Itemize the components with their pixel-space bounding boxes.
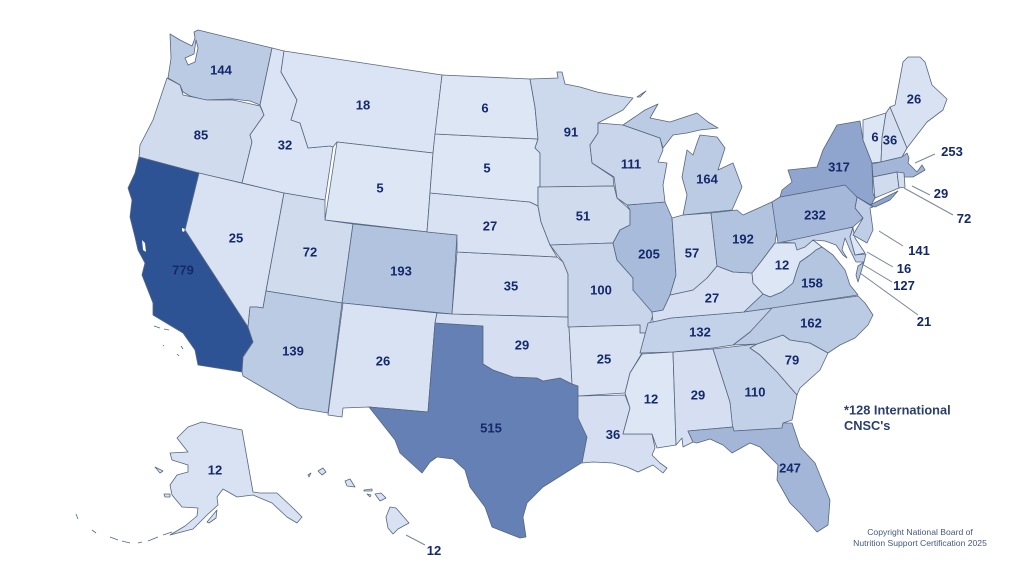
state: Texas	[369, 323, 587, 538]
state: Indiana	[670, 213, 717, 295]
state: Oregon: 85	[194, 128, 208, 142]
state: Nevada	[185, 173, 284, 327]
state: Florida	[688, 423, 830, 532]
leader label: New Jersey 141	[879, 231, 930, 258]
copyright	[853, 527, 987, 548]
state: Massachusetts	[872, 153, 925, 177]
label 12 for Hawaii with leader: 12	[427, 543, 441, 558]
state: Iowa	[538, 186, 630, 245]
state: Louisiana: 36	[606, 427, 620, 442]
state: Kansas	[452, 252, 568, 317]
state: Iowa: 51	[576, 208, 590, 224]
state: Wyoming	[325, 142, 433, 232]
state: Arizona: 139	[282, 344, 304, 358]
state: South Dakota: 5	[483, 160, 491, 176]
state: New Mexico	[328, 303, 437, 417]
state: Alabama: 29	[691, 388, 705, 402]
state: Idaho: 32	[278, 138, 292, 152]
note: international CNSCs: CNSC's	[844, 418, 890, 433]
state: Wisconsin	[590, 123, 667, 205]
leader label: Massachusetts 253	[915, 144, 963, 163]
state: Alabama	[673, 349, 733, 447]
state: California	[128, 157, 253, 372]
state: Illinois: 205	[638, 246, 660, 262]
state: Illinois	[613, 202, 676, 312]
state: Arizona	[242, 291, 342, 413]
leader label: DC 21: 21	[917, 314, 931, 329]
leader label: Rhode Island 29: 29	[934, 186, 948, 201]
state: Indiana: 57	[685, 246, 699, 260]
state: Arkansas: 25	[597, 352, 611, 366]
state: Vermont: 6	[871, 130, 879, 144]
state: Wyoming: 5	[376, 180, 384, 196]
state: Ohio	[711, 202, 777, 273]
state: Georgia: 110	[745, 384, 765, 400]
state: Mississippi: 12	[644, 392, 658, 406]
state: Alaska: 12	[208, 462, 222, 478]
leader label: Connecticut 72	[904, 188, 971, 226]
leader label: New Jersey 141: 141	[908, 243, 930, 258]
leader label: Massachusetts 253: 253	[941, 144, 963, 159]
state: Wisconsin: 111	[621, 156, 641, 172]
state: Virginia: 158	[801, 276, 823, 290]
state: Nebraska	[427, 193, 557, 257]
state: Rhode Island	[897, 172, 905, 188]
state: New Hampshire	[881, 107, 907, 162]
note: international CNSCs: *128 International	[844, 402, 951, 418]
state: Utah: 72	[303, 244, 317, 260]
state: South Dakota	[430, 134, 540, 206]
leader label: Maryland 127	[862, 264, 915, 293]
state: Mississippi	[623, 352, 676, 448]
state: New Mexico: 26	[376, 354, 390, 368]
state: Oklahoma	[435, 313, 572, 384]
leader label: Connecticut 72: 72	[957, 211, 971, 226]
state: Delaware	[850, 228, 865, 255]
state: Louisiana	[578, 395, 667, 473]
leader label: Rhode Island 29	[912, 186, 948, 201]
state: Michigan	[623, 104, 742, 215]
state: Georgia	[713, 344, 797, 431]
state: New York: 317	[828, 160, 850, 174]
state: Florida: 247	[779, 460, 801, 476]
state: Missouri	[550, 243, 653, 333]
state: Maine: 26	[907, 92, 921, 106]
state: Colorado: 193	[390, 264, 412, 278]
state: Missouri: 100	[590, 282, 612, 298]
leader label: Delaware 16: 16	[897, 261, 911, 276]
note: international CNSCs	[844, 402, 951, 433]
label 12 for Hawaii with leader	[406, 535, 441, 558]
state: South Carolina: 79	[785, 352, 799, 368]
state: Kansas: 35	[504, 278, 518, 294]
state: Nebraska: 27	[483, 218, 497, 234]
state: Maryland	[780, 227, 866, 262]
state: Hawaii	[308, 468, 409, 534]
state: Kentucky	[652, 266, 763, 322]
state: Tennessee: 132	[689, 324, 711, 340]
state: Colorado	[342, 224, 457, 314]
state: Arkansas	[569, 325, 647, 396]
state: New York	[780, 121, 898, 207]
leader label: DC 21	[860, 273, 931, 329]
copyright: Nutrition Support Certification 2025	[853, 538, 987, 548]
state: South Carolina	[750, 335, 828, 395]
state: North Carolina: 162	[800, 316, 822, 330]
state: North Dakota	[435, 75, 538, 139]
state: Montana: 18	[356, 98, 370, 112]
state: Montana	[281, 51, 442, 153]
state: Maine	[890, 57, 947, 148]
state: Connecticut	[873, 172, 899, 198]
leader label: Maryland 127: 127	[893, 278, 915, 293]
state: Utah	[266, 193, 353, 303]
state: Minnesota	[530, 72, 646, 187]
copyright: Copyright National Board of	[867, 527, 973, 537]
state: Vermont	[863, 113, 886, 163]
state: Michigan: 164	[696, 172, 719, 186]
state: North Dakota: 6	[481, 100, 489, 116]
state: Texas: 515	[480, 420, 502, 436]
state: California: 779	[172, 262, 194, 278]
state: West Virginia	[752, 240, 822, 297]
state: Oregon	[139, 78, 264, 183]
state: Alaska	[76, 422, 302, 543]
state: New Jersey	[853, 197, 873, 243]
state: Ohio: 192	[732, 232, 754, 246]
state: Pennsylvania	[772, 185, 863, 243]
state: New Hampshire: 36	[883, 132, 897, 148]
state: Washington: 144	[210, 62, 233, 78]
state: Pennsylvania: 232	[804, 208, 826, 222]
state: Washington	[168, 30, 272, 105]
state: Idaho	[242, 48, 333, 200]
state: Kentucky: 27	[705, 290, 719, 306]
state: Nevada: 25	[229, 230, 243, 246]
state: Virginia	[744, 247, 864, 312]
state: Tennessee	[640, 308, 772, 353]
state: Oklahoma: 29	[515, 338, 529, 352]
state: West Virginia: 12	[775, 258, 789, 272]
leader label: Delaware 16	[867, 252, 911, 276]
state: Minnesota: 91	[564, 124, 578, 140]
state: North Carolina	[733, 296, 873, 353]
